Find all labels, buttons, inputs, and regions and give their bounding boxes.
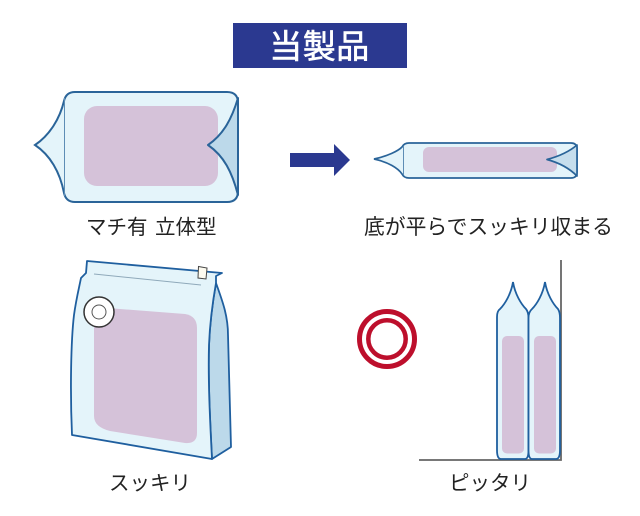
left slim bag [497, 282, 528, 459]
bag 3 gusset [209, 283, 231, 459]
right contents [534, 336, 556, 454]
left contents [502, 336, 524, 454]
bag 1 fold line [64, 98, 66, 196]
title [233, 23, 407, 68]
title: 当製品 [269, 28, 370, 65]
wall and floor [419, 260, 561, 460]
caption: snug fit: ピッタリ [449, 472, 531, 495]
bag 2 contents [423, 147, 557, 172]
bag 2 body [374, 143, 577, 178]
bag 2 gusset [547, 145, 577, 176]
icon: double circle [360, 312, 414, 366]
caption: gusseted: マチ有 [86, 216, 148, 239]
bag 1 body [35, 92, 238, 202]
caption: flat bottom: 底が平らでスッキリ収まる [364, 216, 613, 239]
caption: gusseted [86, 216, 216, 239]
arrow [290, 144, 350, 176]
caption: gusseted: 立体型 [155, 216, 216, 239]
right slim bag [528, 282, 560, 459]
bag 1 contents [84, 106, 218, 186]
bag 1 gusset [208, 98, 238, 195]
bag 3 valve [84, 297, 114, 327]
panel: gusseted bag, side view [35, 92, 238, 202]
panel: front view of bag [71, 261, 231, 459]
caption: neat: スッキリ [109, 472, 191, 495]
bag 3 contents [94, 307, 197, 443]
bag 3 seal line [94, 274, 201, 285]
panel: bags against wall [419, 260, 561, 460]
bag 2 fold line [402, 146, 404, 175]
panel: flattened bag [374, 143, 577, 178]
bag 3 tab [198, 266, 207, 279]
bag 3 front [71, 261, 222, 459]
